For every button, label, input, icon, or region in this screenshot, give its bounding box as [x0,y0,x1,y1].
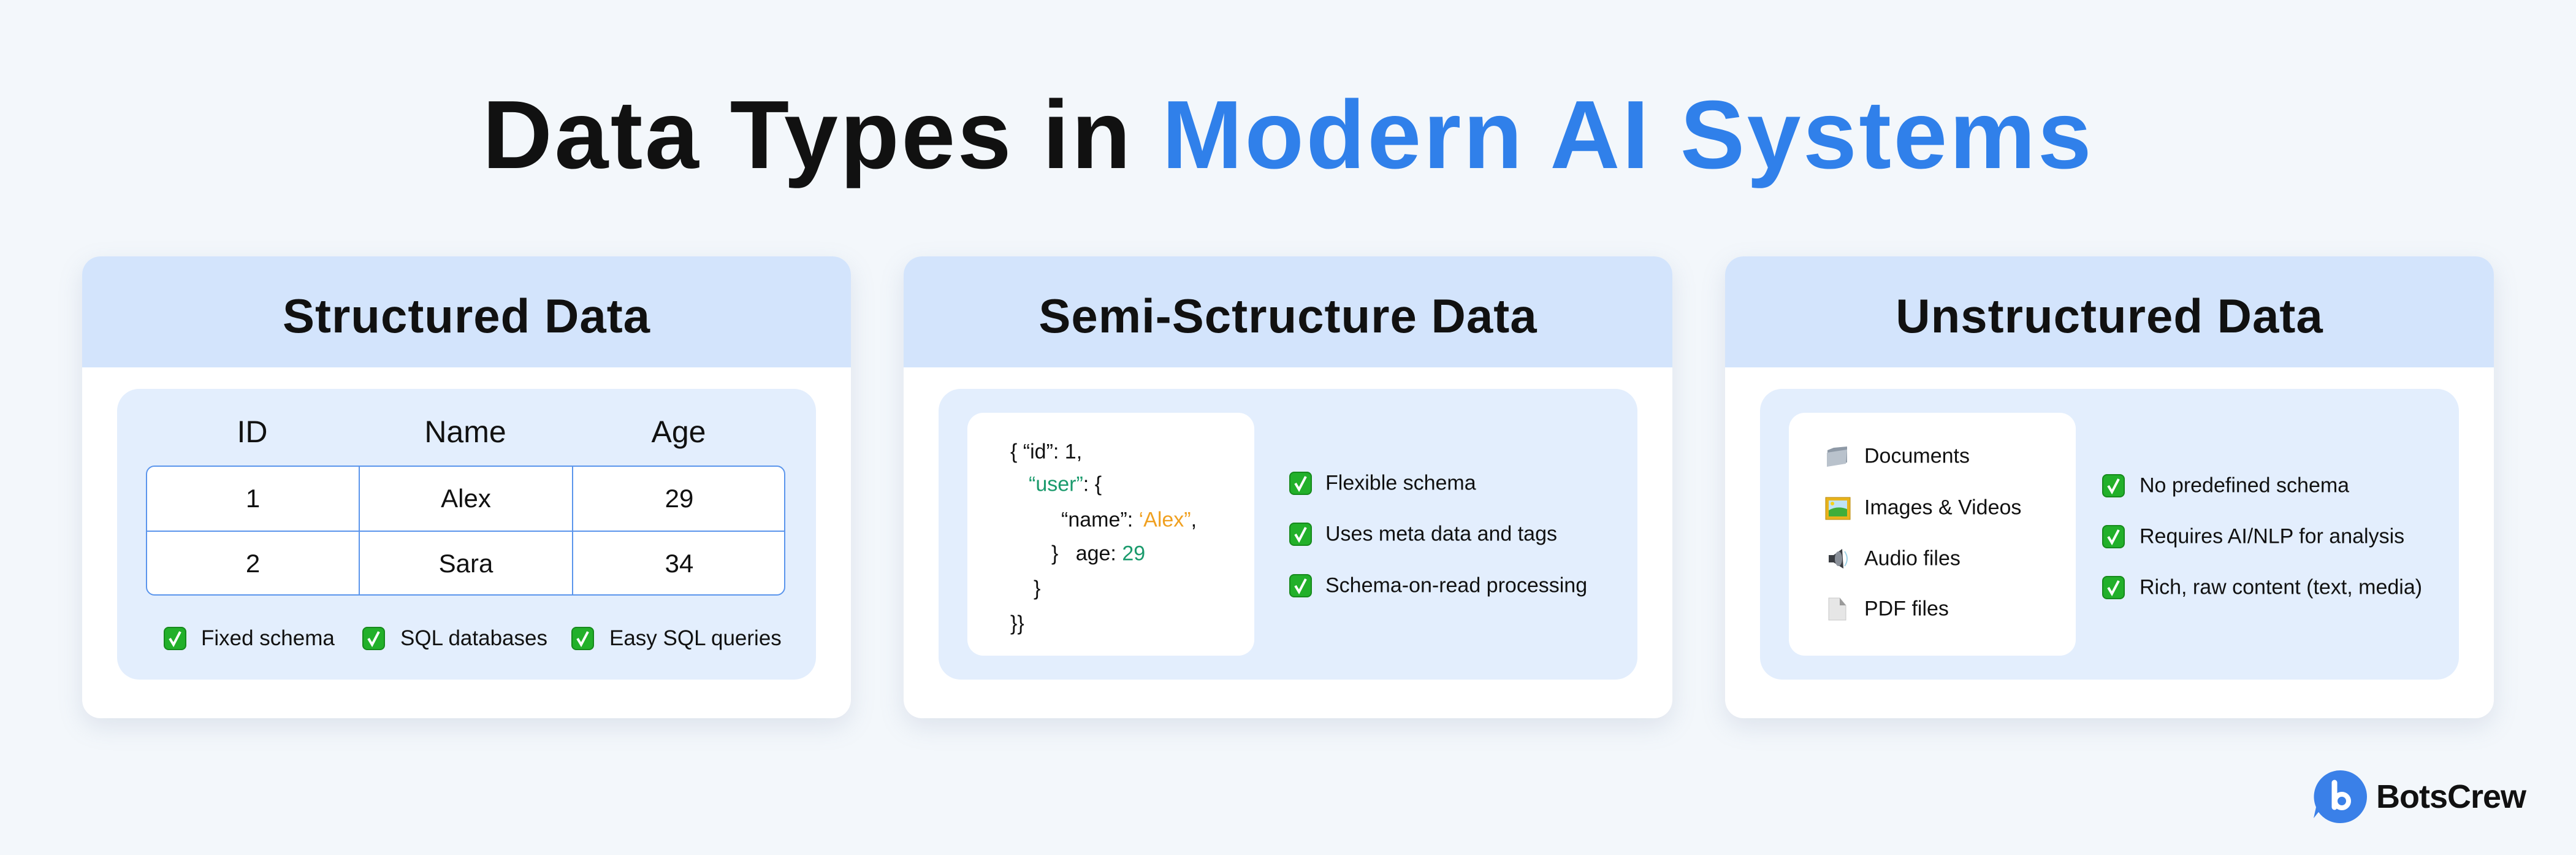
table: 29 [665,484,693,513]
code box: } age: 29 [1051,542,1145,566]
title: Data Types in Modern AI Systems [482,81,2094,189]
table headers: Name [424,415,506,449]
code box: “name”: ‘Alex”, [1061,508,1197,532]
table [146,466,785,596]
table headers: ID [237,415,267,449]
code box: } [1034,577,1040,600]
panel: semi-structured data [904,256,1672,718]
file type list: Audio files [1864,547,1961,570]
panel: unstructured data: Rich, raw content (text, media) [2140,576,2422,599]
icon: page [1828,597,1846,621]
table: 1 [246,484,260,513]
file type list: PDF files [1864,597,1949,621]
table: Sara [439,549,493,578]
heading: semi-structured: Semi-Sctructure Data [1038,289,1538,343]
file type list: Images & Videos [1864,496,2021,520]
table headers [237,415,706,449]
code box [967,413,1254,656]
panel: semi-structured data: Flexible schema [1325,472,1476,495]
logo: BotsCrew: BotsCrew [2376,778,2526,815]
code box: { “id”: 1, [1010,440,1082,464]
code box: }} [1010,612,1024,635]
file type list [1789,413,2076,656]
panel: semi-structured data: Uses meta data and tags [1325,523,1557,546]
table: Alex [441,484,491,513]
heading: structured data: Structured Data [283,289,650,343]
logo: BotsCrew [2314,770,2527,823]
file type list: Documents [1864,445,1970,468]
table headers: Age [652,415,706,449]
panel: unstructured data: Requires AI/NLP for analysis [2140,525,2404,548]
checklist: structured [164,626,782,650]
checklist: structured: Easy SQL queries [609,626,782,650]
checklist: structured: Fixed schema [201,626,335,650]
checklist: semi [1289,472,1587,597]
panel: semi-structured data: Schema-on-read processing [1325,574,1587,597]
icon: folder [1827,447,1847,467]
panel: unstructured data [1725,256,2494,718]
code box: “user”: { [1029,473,1102,496]
panel: structured data [82,256,851,718]
checklist: structured: SQL databases [400,626,547,650]
heading: unstructured: Unstructured Data [1896,289,2323,343]
checklist: unstructured [2102,474,2422,599]
table: 2 [246,549,260,578]
icon: speaker [1829,549,1848,569]
icon: picture [1826,497,1850,520]
panel: unstructured data: No predefined schema [2140,474,2349,497]
table: 34 [665,549,693,578]
